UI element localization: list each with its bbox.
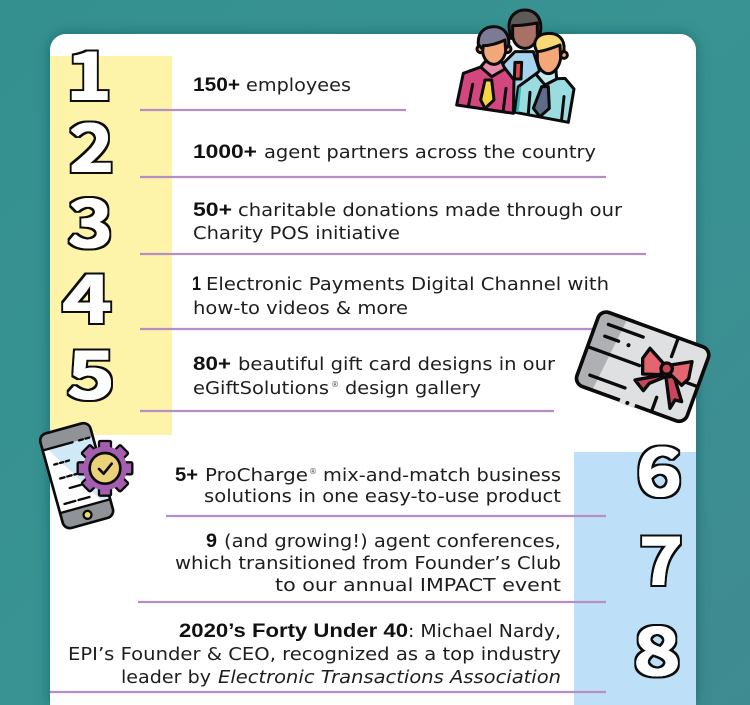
fact 7: 9: [206, 531, 217, 552]
fact 8: EPI’s Founder & CEO, recognized as a top industry: [68, 644, 561, 665]
fact 5: eGiftSolutions: [193, 378, 329, 399]
number 5: 5: [67, 322, 115, 418]
fact 6: [166, 465, 606, 516]
fact 5: [140, 354, 556, 411]
fact 6: mix-and-match business: [323, 465, 561, 486]
fact 1: 150+: [193, 75, 240, 96]
fact 7: [138, 531, 606, 602]
number 1: 1: [66, 23, 112, 119]
fact 6: 5+: [175, 465, 198, 486]
fact 2: agent partners across the country: [264, 142, 596, 163]
panel: blue number column: [574, 452, 696, 705]
fact 7: (and growing!) agent conferences,: [224, 531, 561, 552]
fact 1: employees: [246, 75, 351, 96]
fact 5: ®: [331, 380, 339, 389]
panel: yellow number column: [50, 56, 172, 435]
number 8: 8: [633, 599, 681, 695]
fact 2: 1000+: [193, 142, 257, 163]
number 7: 7: [639, 508, 683, 604]
icon: phone with gear: [39, 421, 132, 530]
number 6: 6: [636, 420, 682, 516]
fact 3: [140, 200, 646, 254]
fact 4: 1: [192, 274, 201, 295]
fact 5: 80+: [193, 354, 231, 375]
fact 5: design gallery: [345, 378, 481, 399]
fact 8: 2020’s Forty Under 40: [179, 621, 408, 642]
fact 8: leader by: [121, 667, 211, 688]
fact 4: Electronic Payments Digital Channel with: [206, 274, 609, 295]
fact 2: [140, 142, 606, 177]
fact 7: which transitioned from Founder’s Club: [175, 553, 561, 574]
fact 4: [140, 274, 609, 329]
number 3: 3: [68, 171, 113, 267]
fact 1: [140, 75, 406, 110]
icon: team of people: [457, 10, 574, 122]
icon: gift card: [573, 310, 711, 426]
fact 8: [50, 621, 606, 692]
fact 3: charitable donations made through our: [238, 200, 623, 221]
fact 6: ProCharge: [205, 465, 308, 486]
fact 6: solutions in one easy-to-use product: [204, 486, 561, 507]
fact 5: beautiful gift card designs in our: [238, 354, 556, 375]
number 4: 4: [62, 246, 112, 342]
fact 7: to our annual IMPACT event: [275, 575, 561, 596]
fact 8: Electronic Transactions Association: [218, 667, 561, 688]
fact 3: 50+: [193, 200, 232, 221]
fact 6: ®: [309, 467, 317, 476]
number 2: 2: [69, 95, 114, 191]
fact 4: how-to videos & more: [193, 298, 408, 319]
fact 3: Charity POS initiative: [193, 223, 400, 244]
fact 8: : Michael Nardy,: [408, 621, 561, 642]
